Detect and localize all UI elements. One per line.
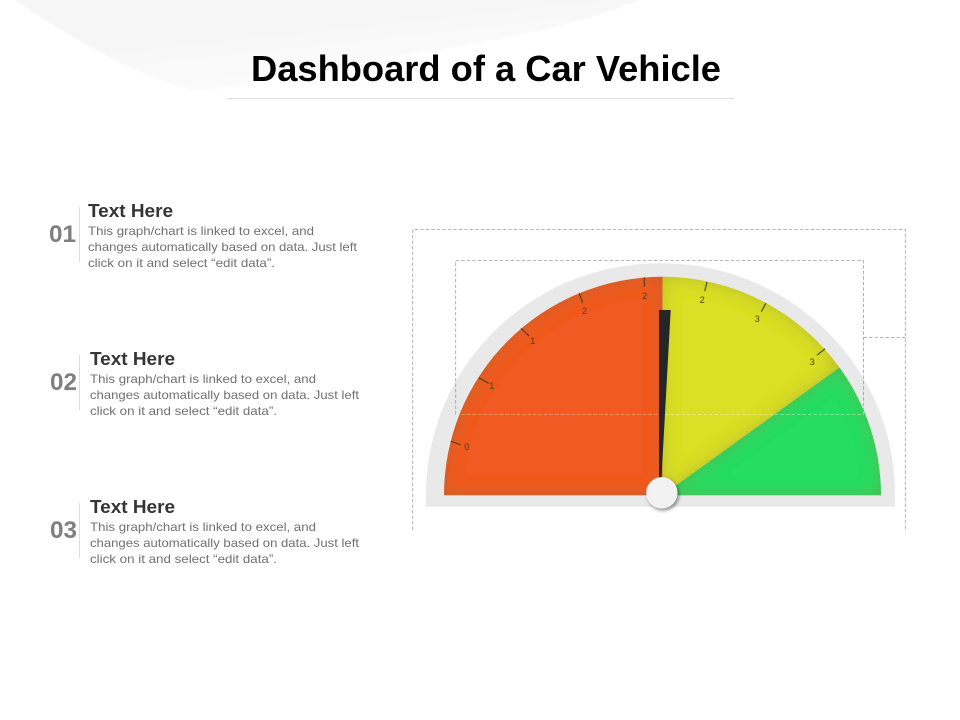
divider 03	[79, 503, 80, 558]
body 01	[88, 224, 358, 270]
tick labels: 2	[582, 306, 587, 316]
title: Dashboard of a Car Vehicle	[251, 48, 721, 89]
text block 02	[50, 349, 360, 418]
number 02: 02	[50, 369, 77, 396]
body 02	[90, 372, 360, 418]
body 01: click on it and select “edit data”.	[88, 256, 275, 270]
tick labels: 1	[489, 381, 494, 391]
tick labels: 1	[530, 336, 535, 346]
number 01: 01	[49, 221, 76, 248]
body 01: changes automatically based on data. Just left	[88, 240, 358, 254]
heading 03: Text Here	[90, 497, 175, 517]
tick labels	[464, 291, 815, 452]
tick labels: 2	[642, 291, 647, 301]
body 03	[90, 520, 360, 566]
tick labels: 2	[700, 295, 705, 305]
text block 01	[49, 201, 358, 270]
tick labels: 0	[464, 442, 469, 452]
gauge outer ring	[426, 263, 895, 507]
dashed frame overlay	[456, 409, 864, 414]
sector: yellow	[662, 277, 840, 495]
body 02: This graph/chart is linked to excel, and	[90, 372, 316, 386]
outer dashed frame	[413, 230, 905, 530]
body 03: click on it and select “edit data”.	[90, 552, 277, 566]
tick labels: 3	[755, 314, 760, 324]
body 01: This graph/chart is linked to excel, and	[88, 224, 314, 238]
gauge	[426, 260, 895, 508]
divider 01	[79, 207, 80, 262]
inner dashed frame	[456, 260, 864, 414]
needle	[659, 310, 671, 495]
needle hub	[646, 477, 678, 508]
body 03: This graph/chart is linked to excel, and	[90, 520, 316, 534]
heading 01: Text Here	[88, 201, 173, 221]
background swoosh	[15, 0, 640, 90]
text block 03	[50, 497, 360, 566]
body 02: changes automatically based on data. Just left	[90, 388, 360, 402]
tick marks	[451, 277, 825, 445]
number 03: 03	[50, 517, 77, 544]
heading 02: Text Here	[90, 349, 175, 369]
divider 02	[79, 355, 80, 410]
body 02: click on it and select “edit data”.	[90, 404, 277, 418]
sector: red	[444, 277, 662, 495]
title underline	[227, 98, 734, 99]
sector: green	[662, 368, 881, 495]
body 03: changes automatically based on data. Just left	[90, 536, 360, 550]
tick labels: 3	[810, 357, 815, 367]
